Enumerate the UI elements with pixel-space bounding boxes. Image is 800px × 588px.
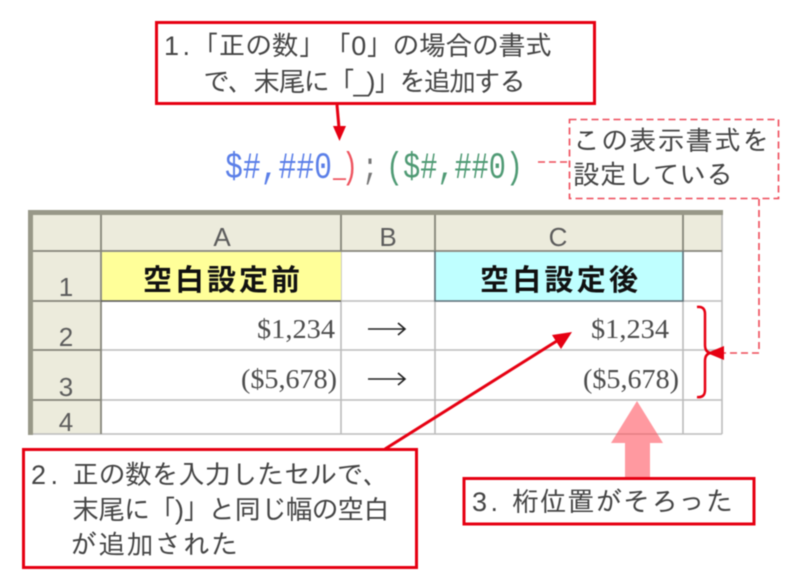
values column A: $1,234 xyxy=(257,314,336,344)
dashed connector: note to brace xyxy=(724,199,759,353)
arrow: callout 2 to cell xyxy=(385,332,572,449)
values column C xyxy=(583,314,679,394)
cell A1: 空白設定前 xyxy=(101,252,341,301)
callout 1: format edit: 「正の数」「0」の場合の書式 xyxy=(192,31,552,61)
callout 3: digits aligned: 桁位置がそろった xyxy=(512,487,733,517)
note: この表示書式を設定している: この表示書式を xyxy=(573,126,769,156)
row header column xyxy=(33,251,101,437)
column header row: A xyxy=(213,222,231,252)
callout 2: blank added xyxy=(24,332,572,568)
dashed connector: format to note xyxy=(538,161,569,163)
spreadsheet table xyxy=(28,210,723,437)
values column A xyxy=(241,314,337,394)
row header column: 2 xyxy=(59,322,73,352)
values column C: $1,234 xyxy=(591,314,670,344)
arrows column B xyxy=(368,323,405,385)
cell C1: 空白設定後: 空白設定後 xyxy=(480,257,638,299)
pink arrow up xyxy=(611,401,663,478)
number format string: ($#,##0) xyxy=(386,148,523,190)
cell C1: 空白設定後 xyxy=(435,251,683,301)
number format string xyxy=(225,146,523,190)
row header column: 3 xyxy=(59,372,73,402)
column header row: B xyxy=(379,222,397,252)
callout 3: digits aligned xyxy=(464,478,754,524)
note: この表示書式を設定している xyxy=(570,120,778,198)
cell A1: 空白設定前: 空白設定前 xyxy=(143,257,300,299)
callout 2: blank added: 末尾に「)」と同じ幅の空白 xyxy=(72,495,390,525)
callout 1: format edit: で、末尾に「_)」を追加する xyxy=(203,67,526,97)
callout 2: blank added: 正の数を入力したセルで、 xyxy=(72,460,390,490)
number format string: ; xyxy=(362,148,378,190)
column header row: C xyxy=(549,222,567,252)
brace with arrow head xyxy=(697,307,724,397)
number format string: $#,##0 xyxy=(225,148,332,190)
callout 2: blank added: が追加された xyxy=(70,530,238,560)
note: この表示書式を設定している: 設定している xyxy=(573,160,733,190)
arrow: callout 1 to format xyxy=(333,105,346,141)
number format string: _ xyxy=(332,146,346,188)
grid lines xyxy=(33,215,722,434)
callout 2: blank added: 2. xyxy=(31,460,58,490)
number format string: ) xyxy=(342,148,358,190)
values column C: ($5,678) xyxy=(583,364,679,394)
callout 1: format edit xyxy=(156,22,594,104)
callout 1: format edit: 1. xyxy=(164,31,190,61)
column header row xyxy=(28,210,723,435)
callout 3: digits aligned: 3. xyxy=(472,487,498,517)
values column A: ($5,678) xyxy=(241,364,337,394)
row header column: 4 xyxy=(59,407,73,437)
row header column: 1 xyxy=(59,272,73,302)
